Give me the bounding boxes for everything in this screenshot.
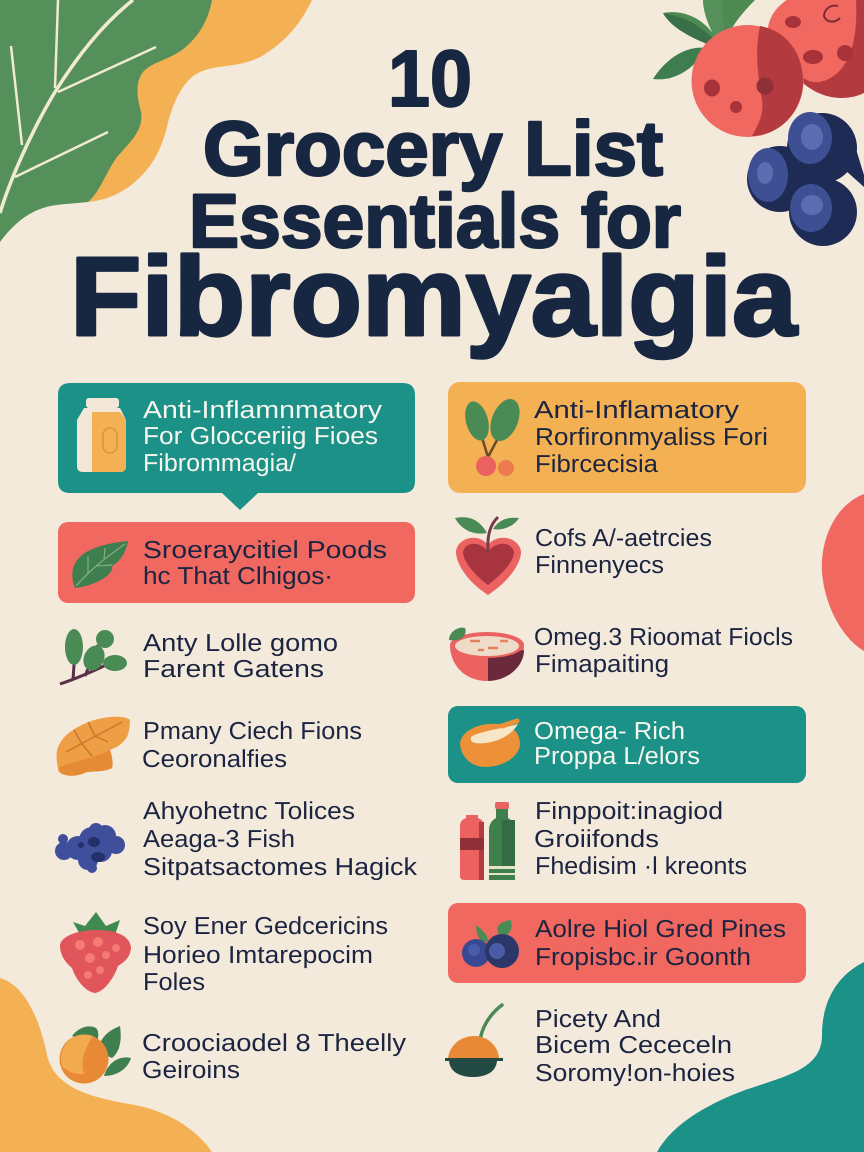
- item: herb sprig: Farent Gatens: [143, 656, 324, 683]
- decoration: right coral circle: [822, 494, 864, 651]
- item: leaf bread: [56, 717, 362, 776]
- item: raspberry: [60, 912, 388, 996]
- item: raspberry: Soy Ener Gedcericins: [143, 913, 388, 940]
- panel: teal anti-inflammatory card: For Glocceriig Fioes: [143, 423, 378, 450]
- icon: herb sprig: [60, 629, 127, 684]
- item: bottles: Fhedisim ·l kreonts: [535, 853, 747, 880]
- item: bowl: [449, 624, 793, 681]
- panel: coral special foods card: [58, 522, 415, 603]
- item: herb sprig: [60, 629, 338, 684]
- icon: plant with berries: [461, 395, 525, 476]
- panel: coral blueberries card: Fropisbc.ir Goonth: [535, 944, 751, 971]
- icon: heart with leaves: [455, 517, 521, 595]
- icon: orange dish: [460, 721, 520, 767]
- panel: coral special foods card: hc That Clhigos·: [143, 563, 333, 590]
- item: blueberry cluster: Aeaga-3 Fish: [143, 826, 295, 853]
- item: raspberry: Horieo Imtarepocim: [143, 942, 373, 969]
- item: orange: Croociaodel 8 Theelly: [142, 1030, 407, 1057]
- item: bottles: Finppoit:inagiod: [535, 798, 723, 825]
- panel: yellow anti-inflammatory card: Rorfironmyaliss Fori: [535, 424, 768, 451]
- item: dish: Picety And: [535, 1006, 661, 1033]
- item: blueberry cluster: [55, 798, 418, 881]
- icon: bottles: [460, 802, 515, 880]
- item: dish: Soromy!on-hoies: [535, 1060, 735, 1087]
- decoration: bottom-left yellow blob: [0, 978, 212, 1152]
- icon: green leaf: [72, 541, 128, 588]
- panel: coral blueberries card: [448, 903, 806, 983]
- item: leaf bread: Ceoronalfies: [142, 746, 287, 773]
- icon: strawberries and blueberries: [653, 0, 864, 246]
- item: blueberry cluster: Sitpatsactomes Hagick: [143, 854, 418, 881]
- panel: teal anti-inflammatory card: Fibrommagia/: [143, 450, 296, 477]
- item: raspberry: Foles: [143, 969, 205, 996]
- panel: teal omega card: Omega- Rich: [534, 718, 685, 745]
- panel: teal omega card: Proppa L/elors: [534, 743, 700, 770]
- item: bottles: Groiifonds: [534, 826, 659, 853]
- icon: orange with leaves: [60, 1026, 131, 1084]
- decoration: top-left yellow blob: [88, 0, 312, 202]
- icon: dish with stem: [445, 1005, 503, 1077]
- title: [70, 34, 798, 359]
- item: heart: Cofs A/-aetrcies: [535, 525, 712, 552]
- icon: blueberry cluster: [55, 823, 125, 873]
- panel: coral special foods card: Sroeraycitiel Poods: [143, 537, 387, 564]
- decoration: top-left green leaf: [0, 0, 212, 242]
- item: heart: Finnenyecs: [535, 552, 664, 579]
- title: Essentials for: [189, 179, 681, 264]
- panel: yellow anti-inflammatory card: Fibrcecisia: [535, 451, 658, 478]
- panel: yellow anti-inflammatory card: Anti-Inflamatory: [534, 397, 740, 424]
- item: orange: Geiroins: [142, 1057, 240, 1084]
- icon: jar: [77, 398, 126, 472]
- item: herb sprig: Anty Lolle gomo: [143, 630, 338, 657]
- icon: raspberry: [60, 912, 131, 993]
- title: Fibromyalgia: [70, 234, 798, 359]
- item: blueberry cluster: Ahyohetnc Tolices: [143, 798, 355, 825]
- item: bowl: Fimapaiting: [535, 651, 669, 678]
- item: leaf bread: Pmany Ciech Fions: [143, 718, 362, 745]
- item: dish: Bicem Cececeln: [535, 1032, 732, 1059]
- item: orange: [60, 1026, 407, 1084]
- title: Grocery List: [203, 106, 663, 192]
- icon: bowl of food: [449, 628, 524, 681]
- panel: teal anti-inflammatory card: Anti-Inflamnmatory: [143, 397, 383, 424]
- item: dish: [445, 1005, 735, 1087]
- title: 10: [388, 34, 472, 123]
- panel: teal anti-inflammatory card: [58, 383, 415, 510]
- item: bowl: Omeg.3 Rioomat Fiocls: [534, 624, 793, 651]
- icon: two blueberries: [462, 920, 519, 968]
- item: heart: [455, 517, 712, 595]
- panel: coral blueberries card: Aolre Hiol Gred Pines: [535, 916, 786, 943]
- item: bottles: [460, 798, 747, 880]
- icon: orange leaf-shaped food: [56, 717, 130, 776]
- panel: yellow anti-inflammatory card: [448, 382, 806, 493]
- panel: teal omega card: [448, 706, 806, 783]
- decoration: bottom-right teal blob: [657, 962, 864, 1152]
